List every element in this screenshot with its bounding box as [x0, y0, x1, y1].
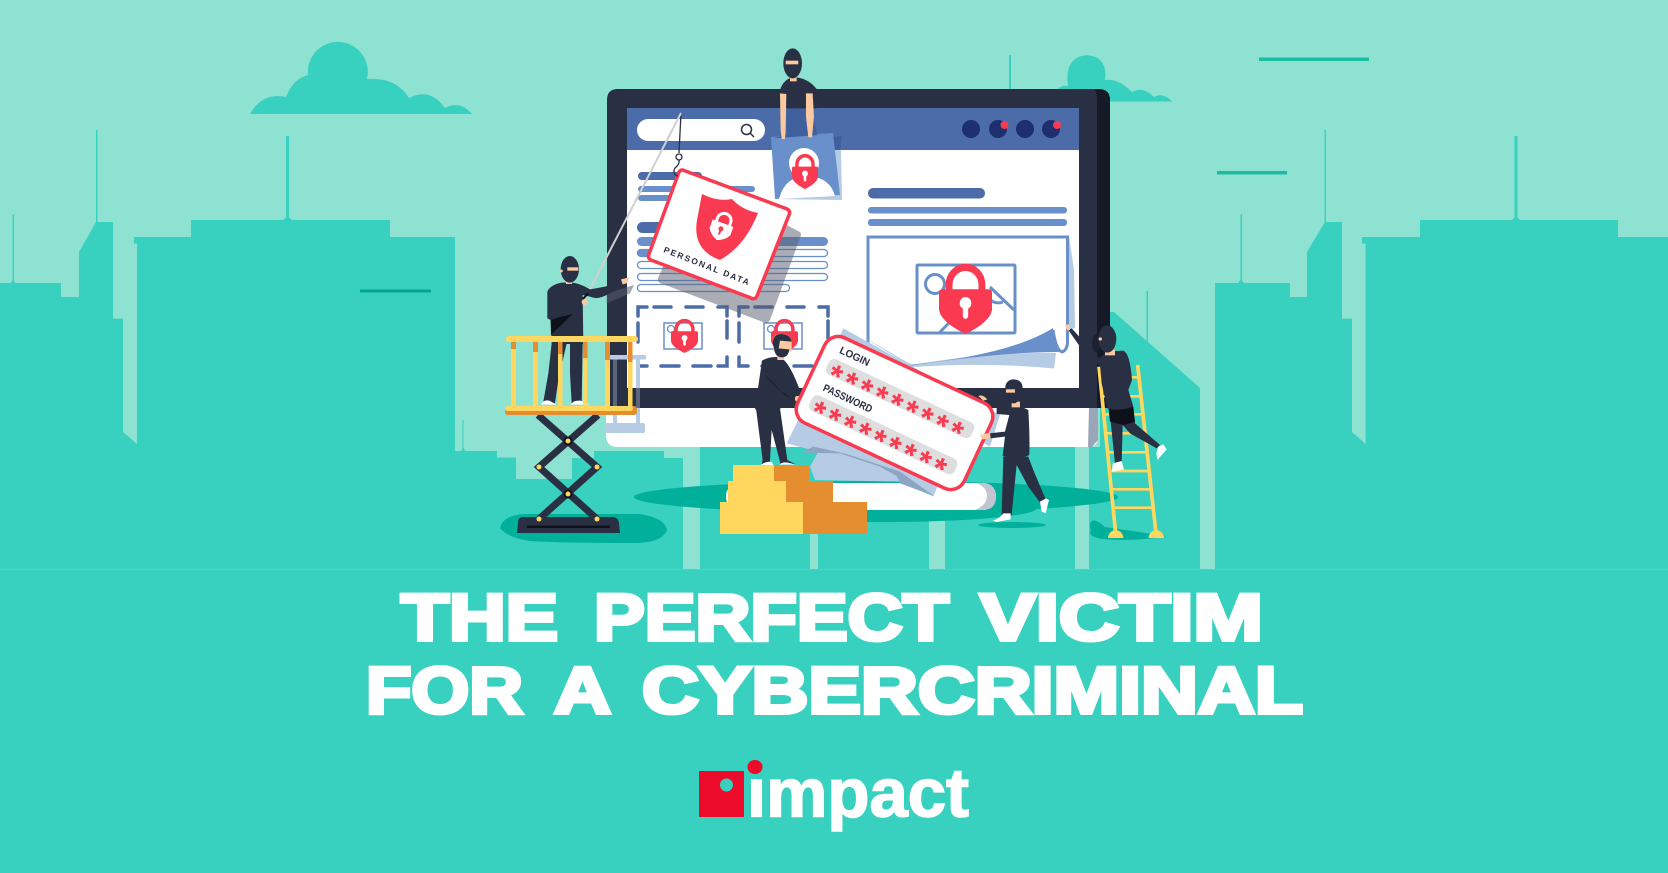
password label: PASSWORD [821, 382, 874, 416]
lift railing [505, 336, 638, 415]
stand ghost rails [605, 355, 646, 433]
top rail [506, 336, 638, 342]
chin side shade [1088, 408, 1098, 447]
fishing hook [674, 113, 682, 176]
ladder [1090, 365, 1167, 540]
right cloud [1051, 55, 1172, 102]
personal data card [648, 170, 790, 299]
title: PERFECT [594, 580, 949, 654]
search box [637, 119, 765, 141]
gold boxes [720, 465, 867, 534]
monitor chin [606, 400, 1098, 447]
screen [627, 108, 1079, 388]
title: VICTIM [980, 580, 1263, 654]
thief shoes on boxes [761, 462, 795, 465]
card label: PERSONAL DATA [662, 245, 751, 287]
platform [505, 406, 637, 415]
locked image thumbnails [638, 307, 828, 366]
left cloud [250, 42, 472, 114]
right article [860, 188, 1075, 368]
page curl [860, 335, 1056, 368]
fishing rod [587, 113, 681, 295]
left skyline [0, 130, 683, 569]
monitor [606, 89, 1110, 447]
title: THE [401, 580, 558, 654]
impact logo [699, 754, 969, 832]
card shadow [658, 180, 801, 323]
password field: ********* [805, 393, 956, 489]
ground band [0, 569, 1668, 873]
username field: ********* [822, 357, 973, 453]
header buttons [962, 120, 1061, 138]
monitor stand base [726, 483, 996, 510]
ladder shadow [1090, 527, 1167, 540]
login label: LOGIN [837, 345, 872, 369]
logo wordmark: impact [747, 754, 969, 832]
title [366, 580, 1303, 727]
login card [790, 332, 998, 497]
ground shadows [500, 481, 1166, 543]
shield lock [707, 210, 737, 244]
post shadows [511, 342, 632, 362]
paper behind login card [787, 328, 1000, 497]
sky lines [1217, 58, 1369, 174]
monitor bezel [607, 89, 1110, 408]
thief holding login card right [978, 379, 1049, 522]
title: CYBERCRIMINAL [642, 653, 1303, 727]
thief with fishing rod [541, 256, 634, 405]
right skyline [683, 55, 1668, 569]
ground strips [683, 388, 1215, 569]
logo dot [748, 760, 762, 774]
picture icon [917, 265, 1015, 333]
lift base [517, 517, 620, 533]
left text lines [637, 172, 828, 292]
title: A [554, 653, 611, 727]
scissor joints [536, 438, 600, 522]
scissor arms [538, 415, 598, 519]
logo square [699, 771, 744, 817]
railing posts [511, 342, 632, 406]
title: FOR [366, 653, 523, 727]
thief on top of monitor [773, 48, 833, 139]
profile card [771, 133, 842, 200]
scissor lift [517, 355, 646, 533]
image frame [868, 237, 1068, 352]
building accent line [360, 290, 431, 292]
thief holding login card left [755, 334, 803, 464]
shield [696, 194, 758, 260]
browser header [627, 108, 1079, 150]
thief on ladder [1065, 324, 1167, 472]
